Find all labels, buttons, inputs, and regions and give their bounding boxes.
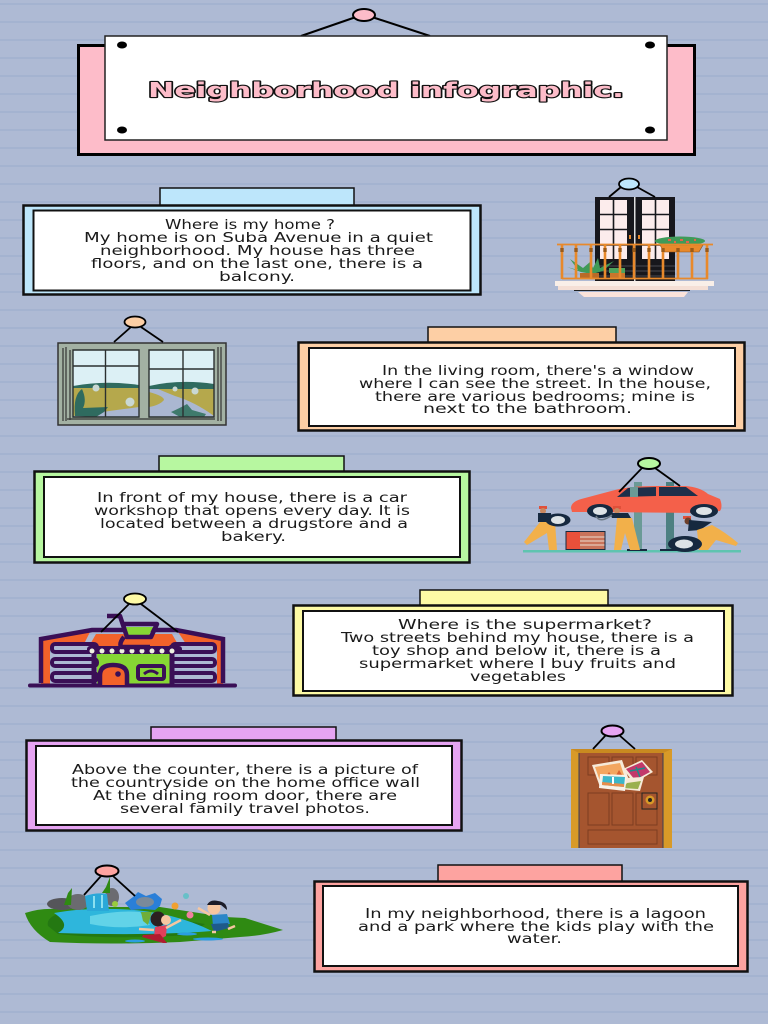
text: photos description: the countryside on the home office wall [71,776,420,791]
text: supermarket description: toy shop and below it, there is a [372,644,661,659]
text: photos description: several family travel photos. [120,802,370,817]
icon: supermarket [28,594,237,688]
lift posts [627,482,680,551]
panel: lagoon and park text [314,865,748,972]
store body [28,630,237,688]
text: supermarket description: Two streets behind my house, there is a [340,631,694,646]
icon: balcony [555,178,714,297]
text: workshop description: bakery. [221,530,286,545]
child in splash [112,892,194,925]
panel: picture and photos [26,727,462,830]
text: home description: neighborhood. My house has three [100,244,415,259]
door lock [642,793,657,809]
text: home description [84,218,433,285]
text: photos description: Above the counter, there is a picture of [72,763,419,778]
icon: door with photos [571,726,672,848]
panel: car workshop [34,456,470,562]
store door [100,665,164,685]
balcony hanger [609,178,655,197]
text: lagoon description: and a park where the kids play with the [358,920,714,935]
store awning [87,646,182,654]
car [571,486,722,518]
door hanger [593,726,635,749]
panel: where is my home [24,188,480,294]
water puddles [125,932,223,942]
text: lagoon description: In my neighborhood, there is a lagoon [365,907,706,922]
text: home description: balcony. [219,270,295,285]
text: supermarket description: Where is the supermarket? [398,618,652,633]
balcony railing [557,244,713,279]
text: photos description: At the dining room door, there are [93,789,397,804]
workshop hanger [619,458,680,492]
text: home description: My home is on Suba Avenue in a quiet [84,231,433,246]
mechanics [524,506,738,552]
text: workshop description: workshop that opens every day. It is [94,504,410,519]
text: lagoon description: water. [507,932,562,947]
panel: supermarket [294,590,732,696]
lagoon hanger [84,866,135,896]
title: Neighborhood infographic. [148,78,624,102]
shopping cart [107,616,157,647]
icon: lagoon and park [25,866,283,944]
window right pane [149,350,214,417]
supermarket hanger [101,594,178,632]
balcony slab [555,281,714,297]
text: workshop description: In front of my house, there is a car [97,491,408,506]
text: supermarket description: supermarket where I buy fruits and [359,657,676,672]
icon: car workshop [523,458,741,552]
icon: window [58,316,226,425]
rocks and waterfall [47,877,119,911]
window left pane [73,350,139,417]
text: workshop description: located between a drugstore and a [100,517,408,532]
door panels [588,757,657,844]
text: lagoon description [358,907,714,947]
boy [198,900,235,932]
text: home description: floors, and on the last one, there is a [91,257,423,272]
text: living room description: next to the bathroom. [423,402,632,417]
text: living room description [359,364,711,417]
panel: living room [298,327,744,430]
text: supermarket description [340,618,694,685]
door photos [592,760,653,791]
text: living room description: where I can see the street. In the house, [359,377,711,392]
text: workshop description [94,491,410,545]
window hanger [114,316,163,342]
balcony plants [567,236,705,279]
text: home description: Where is my home ? [165,218,335,233]
panel: title sign [78,9,694,154]
lagoon water [54,909,212,934]
text: supermarket description: vegetables [470,670,566,685]
text: living room description: In the living room, there's a window [382,364,694,379]
text: living room description: there are various bedrooms; mine is [375,390,695,405]
girl [139,912,181,943]
text: photos description [71,763,420,817]
